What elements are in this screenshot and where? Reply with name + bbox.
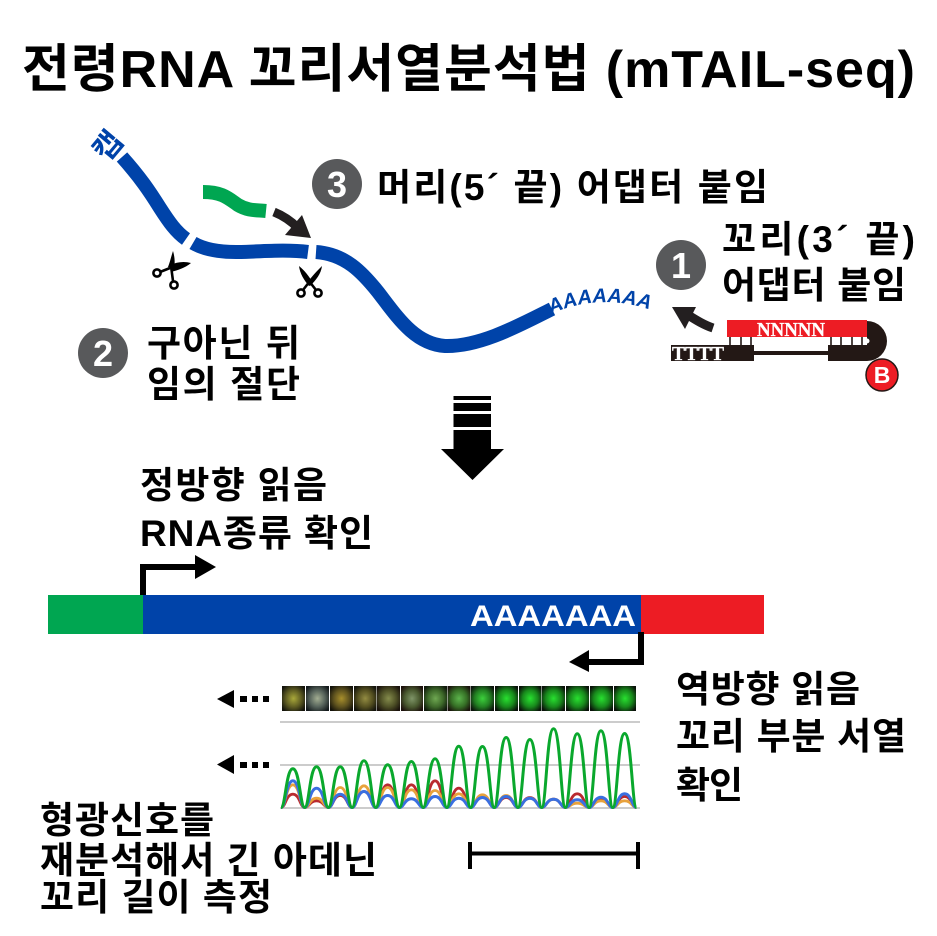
5' adapter: green strand	[203, 192, 266, 211]
reverse read label	[676, 669, 906, 806]
reverse read label: 역방향 읽음	[676, 669, 860, 710]
trace: red	[281, 781, 636, 808]
step 1 badge: 1	[671, 245, 691, 286]
step 2 label: 구아닌 뒤	[147, 323, 300, 364]
step 1 badge	[656, 240, 706, 290]
step 3 label: 머리(5´ 끝) 어댑터 붙임	[377, 167, 768, 208]
trace: green	[281, 729, 636, 808]
arrow: reverse read	[569, 632, 641, 672]
step 3 badge: 3	[327, 164, 347, 205]
RNA strand: main fragment	[316, 252, 552, 346]
sequencing library bar	[48, 595, 764, 634]
dotted arrow: chromatogram	[217, 755, 269, 774]
step 2 badge: 2	[93, 333, 113, 374]
biotin badge	[866, 359, 898, 391]
fluorescence reanalysis label: 재분석해서 긴 아데닌	[40, 840, 377, 881]
poly-A tail: AAAAAAA	[552, 288, 650, 312]
panel: RNA adapter ligation diagram	[78, 125, 915, 405]
forward read label	[140, 465, 373, 554]
fluorescence reanalysis label: 형광신호를	[40, 800, 214, 841]
TTTT overhang: TTTT	[672, 343, 725, 365]
arrow: forward read	[143, 555, 216, 595]
reverse read label: 꼬리 부분 서열	[676, 716, 906, 757]
base pairs	[730, 337, 862, 345]
bracket: long poly-A range	[470, 842, 638, 869]
RNA strand: middle fragment	[193, 243, 308, 252]
3' adapter	[671, 319, 898, 391]
step 1 label: 어댑터 붙임	[722, 265, 906, 306]
forward read label: RNA종류 확인	[140, 513, 373, 554]
step 1 label: 꼬리(3´ 끝)	[722, 219, 915, 260]
biotin badge: B	[874, 362, 890, 388]
chromatogram chart	[280, 722, 640, 808]
step 3 badge	[312, 159, 362, 209]
adapter red strand	[727, 320, 867, 337]
poly-A label: AAAAAAA	[470, 600, 636, 633]
step 1 label	[722, 219, 915, 306]
icon: right scissors	[297, 266, 322, 297]
step 2 badge	[78, 328, 128, 378]
reverse read label: 확인	[676, 765, 743, 806]
title: 전령RNA 꼬리서열분석법 (mTAIL-seq)	[22, 41, 915, 99]
random barcode: NNNNN	[757, 319, 826, 341]
trace: orange	[281, 785, 636, 808]
fluorescence reanalysis label	[40, 800, 377, 918]
fluorescence reanalysis label: 꼬리 길이 측정	[40, 877, 272, 918]
hairpin	[867, 321, 887, 361]
trace: blue	[281, 781, 636, 808]
arrow: adapter to tail	[672, 307, 713, 329]
dotted arrow: images	[217, 690, 269, 708]
icon: cap label: 캡	[87, 125, 130, 167]
adapter lower strand	[671, 345, 867, 361]
RNA strand: first fragment	[122, 157, 186, 239]
arrow: adapter to cut site	[274, 212, 311, 238]
big down arrow	[441, 396, 504, 480]
forward read label: 정방향 읽음	[140, 465, 327, 506]
step 2 label: 임의 절단	[147, 364, 300, 405]
step 2 label	[147, 323, 300, 405]
fluorescence image strip	[282, 686, 636, 711]
icon: left scissors	[153, 251, 191, 289]
